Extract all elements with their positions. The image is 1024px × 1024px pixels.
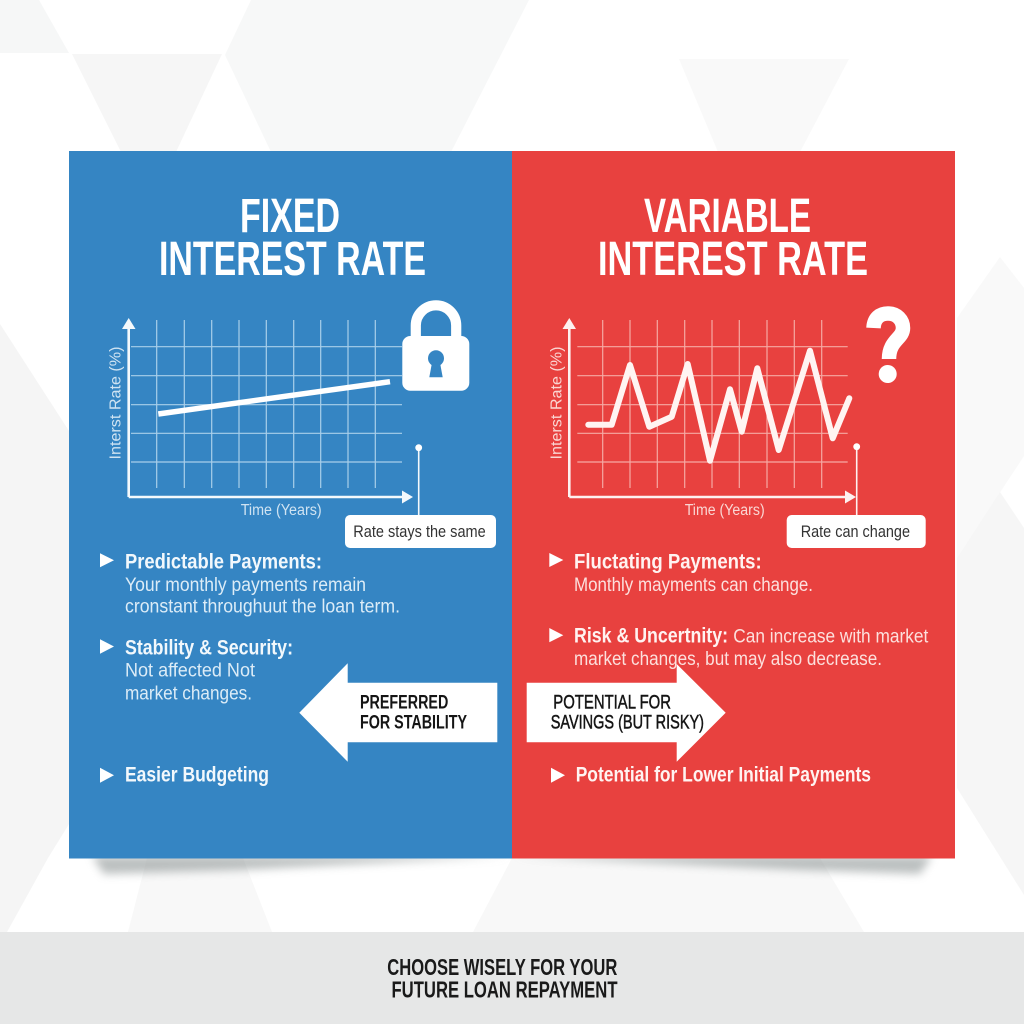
heading: fixed interest rate: INTEREST RATE	[159, 233, 426, 286]
heading: variable interest rate: INTEREST RATE	[598, 233, 868, 286]
panel: fixed interest rate	[69, 151, 512, 858]
bullet: predictable payments	[100, 549, 400, 618]
bullet: stability and security: Not affected Not	[125, 661, 256, 682]
arrow: potential for savings	[527, 664, 726, 762]
callout: rate can change	[787, 443, 926, 548]
panel drop shadow	[92, 856, 932, 874]
callout: rate stays the same: Rate stays the same	[353, 523, 486, 541]
bullet: easier budgeting: Easier Budgeting	[125, 763, 269, 787]
bullet: risk and uncertainty: market changes, but may also decrease.	[574, 649, 882, 670]
heading: variable interest rate: VARIABLE	[644, 190, 811, 243]
chart: fixed rate line: Interst Rate (%)	[108, 346, 124, 460]
footer text: CHOOSE WISELY FOR YOUR	[387, 954, 618, 980]
icon: padlock	[402, 305, 469, 391]
bullet: risk and uncertainty: Can increase with market	[733, 627, 929, 648]
bullet: risk and uncertainty: Risk & Uncertnity:	[574, 624, 728, 648]
bullet: fluctuating payments: Monthly mayments can change.	[574, 575, 813, 596]
callout: rate can change: Rate can change	[801, 523, 910, 541]
bullet: predictable payments: Predictable Payments:	[125, 549, 322, 573]
callout: rate stays the same	[345, 444, 496, 548]
bullet: stability and security: market changes.	[125, 683, 252, 704]
footer text: FUTURE LOAN REPAYMENT	[392, 977, 618, 1003]
arrow: preferred for stability: PREFERRED	[360, 692, 448, 713]
chart: variable rate line	[548, 318, 856, 519]
footer text	[387, 954, 618, 1003]
chart: fixed rate line: Time (Years)	[241, 502, 322, 519]
footer band	[0, 932, 1024, 1024]
arrow: potential for savings: SAVINGS (BUT RISKY)	[551, 712, 704, 733]
chart: variable rate line: Time (Years)	[685, 502, 765, 519]
bullet: risk and uncertainty	[549, 624, 929, 670]
icon: question mark	[874, 314, 903, 383]
heading: fixed interest rate	[159, 190, 426, 286]
bullet: potential for lower initial payments: Potential for Lower Initial Payments	[576, 763, 871, 787]
heading: variable interest rate	[598, 190, 868, 286]
chart: variable rate line: Interst Rate (%)	[548, 346, 566, 460]
panel: variable interest rate	[512, 151, 955, 858]
bullet: fluctuating payments: Fluctating Payments:	[574, 549, 762, 573]
arrow: potential for savings: POTENTIAL FOR	[553, 692, 671, 713]
bullet: fluctuating payments	[549, 549, 813, 596]
bullet: predictable payments: cronstant throughuut the loan term.	[125, 597, 400, 618]
bullet: stability and security	[100, 635, 293, 704]
arrow: preferred for stability	[299, 663, 497, 762]
heading: fixed interest rate: FIXED	[240, 190, 340, 243]
chart: fixed rate line	[108, 318, 413, 519]
arrow: preferred for stability: FOR STABILITY	[360, 712, 467, 733]
bullet: predictable payments: Your monthly payments remain	[125, 575, 366, 596]
bullet: stability and security: Stability & Security:	[125, 635, 293, 659]
